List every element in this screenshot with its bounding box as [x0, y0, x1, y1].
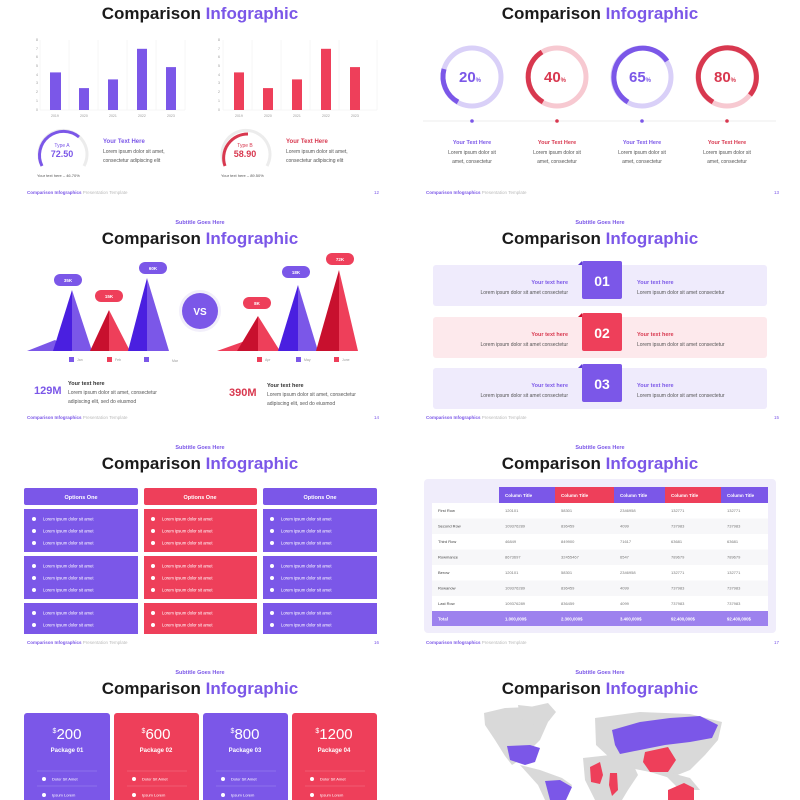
table: 132771 [727, 508, 741, 513]
table: Total [438, 616, 448, 622]
map [484, 703, 722, 800]
table: Column Title [505, 493, 533, 498]
row 03: Lorem ipsum dolor sit amet consectetur [480, 393, 568, 399]
table: 132771 [671, 570, 685, 575]
slide 6: data table [424, 445, 780, 645]
table: First Row [438, 508, 455, 513]
donut 65%: 65% [629, 69, 652, 86]
table: 109376289 [505, 524, 526, 528]
option columns: Lorem ipsum dolor sit amet [162, 516, 213, 522]
footer slide 1: 12 [374, 190, 380, 195]
subtitle slide 4: Subtitle Goes Here [575, 220, 625, 226]
bubbles right: 72K [336, 257, 345, 262]
legend right: Apr [265, 358, 271, 362]
table: 92.400,000$ [671, 616, 696, 622]
bar chart red: 3 [218, 81, 220, 85]
legend left: Feb [115, 358, 121, 362]
gauge type B: Your text here – 89.50% [221, 173, 264, 178]
package cards: 200 [56, 726, 81, 743]
package cards: Ipsum Lorem [142, 792, 166, 798]
row 02: Your text here [531, 332, 568, 338]
option columns: Lorem ipsum dolor sit amet [281, 564, 332, 568]
bar chart red: 5 [218, 64, 220, 68]
table: 58301 [561, 508, 573, 513]
slide 4: numbered rows [426, 220, 780, 420]
option columns: Lorem ipsum dolor sit amet [281, 622, 332, 628]
legend right: June [342, 358, 350, 362]
table: Column Title [561, 493, 589, 498]
package cards [24, 713, 377, 800]
table [424, 479, 776, 633]
stat 129M: 129M [34, 385, 62, 397]
table: 63681 [671, 539, 683, 544]
text block A: Your Text Here [103, 139, 145, 145]
text block B: Your Text Here [286, 139, 328, 145]
row 02: Lorem ipsum dolor sit amet consectetur [637, 342, 725, 348]
captions: Your Text Here [538, 140, 576, 146]
bubbles left: 35K [64, 278, 73, 283]
table: 6547 [620, 554, 630, 560]
table: 63681 [727, 539, 739, 544]
captions [448, 140, 752, 165]
donut 20% [443, 48, 501, 106]
bar chart purple: 1 [36, 99, 38, 103]
option columns: Lorem ipsum dolor sit amet [281, 588, 332, 592]
package cards: Dolor Sit Amet [231, 776, 257, 782]
legend left [69, 357, 179, 363]
table: 836459 [561, 586, 575, 590]
title slide 7: Comparison Infographic [102, 679, 298, 698]
bubbles left: 60K [149, 266, 158, 271]
table: 1.000,000$ [505, 616, 527, 622]
table: 120101 [505, 570, 519, 575]
text block B: Lorem ipsum dolor sit amet, [286, 149, 348, 155]
text block B: consectetur adipiscing elit [286, 158, 344, 164]
donut 65% [613, 48, 671, 106]
footer slide 6: Comparison Infographics Presentation Template [426, 640, 526, 645]
stat 390M: 390M [229, 387, 257, 399]
slide 7: pricing packages [24, 670, 377, 800]
table: 836459 [561, 601, 575, 606]
package cards: 600 [145, 726, 170, 743]
mountains right [217, 270, 358, 351]
bar chart purple: 2 [36, 90, 38, 94]
donut 40%: 40% [544, 69, 567, 86]
subtitle slide 5: Subtitle Goes Here [175, 445, 225, 451]
table: 32455467 [561, 554, 580, 560]
package cards: Package 04 [318, 748, 351, 754]
table: 849900 [561, 539, 575, 544]
row 02: Lorem ipsum dolor sit amet consectetur [480, 342, 568, 348]
option columns: Lorem ipsum dolor sit amet [43, 610, 94, 616]
footer slide 3: 14 [374, 415, 380, 420]
stat 129M: adipiscing elit, sed do eiusmod [68, 399, 136, 405]
row 01: Your text here [531, 280, 568, 286]
option columns: Lorem ipsum dolor sit amet [162, 540, 213, 546]
vs badge: VS [193, 307, 207, 318]
captions: amet, consectetur [452, 159, 492, 165]
option columns: Lorem ipsum dolor sit amet [43, 516, 94, 522]
timeline [423, 119, 776, 123]
table: 109376289 [505, 601, 526, 606]
bar chart red: 1 [218, 99, 220, 103]
footer slide 6: 17 [774, 640, 780, 645]
option columns: Lorem ipsum dolor sit amet [162, 564, 213, 568]
table: Berow [438, 570, 449, 575]
option columns: Options One [184, 495, 216, 501]
table: 737983 [671, 601, 685, 606]
captions: Lorem ipsum dolor sit [703, 150, 752, 156]
table: 120101 [505, 508, 519, 513]
title slide 5: Comparison Infographic [102, 454, 298, 473]
package cards: Ipsum Lorem [320, 792, 344, 798]
table: 2.300,000$ [561, 616, 583, 622]
slide 8: world map [484, 670, 722, 800]
table: Last Row [438, 601, 455, 606]
donut 80%: 80% [714, 69, 737, 86]
legend left: Jan [77, 358, 83, 362]
captions: Lorem ipsum dolor sit [448, 150, 497, 156]
gauge type A: Type A [54, 143, 70, 149]
bar chart red: 2023 [351, 114, 359, 118]
table: 58301 [561, 570, 573, 575]
table: 92.400,000$ [727, 616, 752, 622]
gauge type A: Your text here – 46.70% [37, 173, 80, 178]
package cards: Dolor Sit Amet [320, 776, 346, 782]
option columns: Options One [64, 495, 98, 501]
bar chart red: 2022 [322, 114, 330, 118]
vs badge [179, 290, 221, 332]
table: Second Row [438, 524, 461, 528]
package cards: Package 03 [229, 748, 262, 754]
table: 132771 [671, 508, 685, 513]
footer slide 5: Comparison Infographics Presentation Template [27, 640, 127, 645]
row 03 [433, 364, 767, 409]
footer slide 2: Comparison Infographics Presentation Template [426, 190, 526, 195]
bar chart red: 2 [218, 90, 220, 94]
slide 5: options grid [24, 445, 380, 645]
bubbles left: 15K [105, 294, 114, 299]
subtitle slide 7: Subtitle Goes Here [175, 670, 225, 676]
bar chart red: 7 [218, 47, 220, 51]
footer slide 1: Comparison Infographics Presentation Template [27, 190, 127, 195]
gauge type B: 58.90 [234, 149, 256, 159]
table: 4099 [620, 524, 630, 528]
table: 836459 [561, 524, 575, 528]
package cards: $ [315, 728, 319, 735]
table: 737983 [671, 524, 685, 528]
bar chart red: 2020 [264, 114, 272, 118]
slide 1: bar charts and gauges [27, 4, 380, 195]
subtitle slide 8: Subtitle Goes Here [575, 670, 625, 676]
table: 132771 [727, 570, 741, 575]
captions: Your Text Here [453, 140, 491, 146]
bubbles right [243, 253, 354, 309]
captions: Lorem ipsum dolor sit [533, 150, 582, 156]
row 01: Lorem ipsum dolor sit amet consectetur [637, 290, 725, 296]
bubbles right: 18K [292, 270, 301, 275]
package cards: Ipsum Lorem [231, 792, 255, 798]
bar chart purple: 2021 [109, 114, 117, 118]
bar chart purple: 2020 [80, 114, 88, 118]
option columns: Lorem ipsum dolor sit amet [162, 588, 213, 592]
table: 4099 [620, 601, 630, 606]
bar chart purple: 4 [36, 73, 38, 77]
option columns [24, 488, 377, 634]
title slide 8: Comparison Infographic [502, 679, 698, 698]
title slide 3: Comparison Infographic [102, 229, 298, 248]
title slide 4: Comparison Infographic [502, 229, 698, 248]
slide 2: donut percentages [423, 4, 780, 195]
stat 390M: Lorem ipsum dolor sit amet, consectetur [267, 392, 356, 398]
legend right: May [304, 358, 311, 362]
text block A: consectetur adipiscing elit [103, 158, 161, 164]
option columns: Lorem ipsum dolor sit amet [281, 516, 332, 522]
package cards: $ [142, 728, 146, 735]
table: 8673697 [505, 554, 521, 560]
captions: Lorem ipsum dolor sit [618, 150, 667, 156]
option columns: Options One [304, 495, 336, 501]
captions: amet, consectetur [537, 159, 577, 165]
table: Rowanow [438, 586, 456, 590]
text block A [103, 139, 165, 164]
package cards: Dolor Sit Amet [142, 776, 168, 782]
table: Column Title [620, 493, 648, 498]
bar chart red: 6 [218, 55, 220, 59]
subtitle slide 3: Subtitle Goes Here [175, 220, 225, 226]
table: 737983 [727, 524, 741, 528]
table: 737983 [671, 586, 685, 590]
gauge type A: 72.50 [51, 149, 73, 159]
footer slide 5: 16 [374, 640, 380, 645]
stat 129M: Lorem ipsum dolor sit amet, consectetur [68, 390, 157, 396]
captions: Your Text Here [708, 140, 746, 146]
captions: Your Text Here [623, 140, 661, 146]
stat 129M [34, 381, 157, 405]
option columns: Lorem ipsum dolor sit amet [162, 576, 213, 580]
bar chart purple: 6 [36, 55, 38, 59]
captions: amet, consectetur [622, 159, 662, 165]
table: 789679 [727, 554, 741, 560]
bubbles left [54, 262, 167, 302]
option columns: Lorem ipsum dolor sit amet [162, 610, 213, 616]
stat 129M: Your text here [68, 381, 105, 387]
row 01 [433, 261, 767, 306]
option columns: Lorem ipsum dolor sit amet [281, 528, 332, 534]
table: 71617 [620, 539, 632, 544]
option columns: Lorem ipsum dolor sit amet [281, 610, 332, 616]
captions: amet, consectetur [707, 159, 747, 165]
table: 2346958 [620, 570, 636, 575]
stat 390M [229, 383, 356, 407]
row 02 [433, 313, 767, 358]
footer slide 2: 13 [774, 190, 780, 195]
table: Rowmance [438, 554, 459, 560]
donut 20%: 20% [459, 69, 482, 86]
table: 737983 [727, 601, 741, 606]
bar chart purple: 3 [36, 81, 38, 85]
footer slide 3: Comparison Infographics Presentation Template [27, 415, 127, 420]
option columns: Lorem ipsum dolor sit amet [162, 622, 213, 628]
row 03: Lorem ipsum dolor sit amet consectetur [637, 393, 725, 399]
donut 40% [528, 48, 586, 106]
option columns: Lorem ipsum dolor sit amet [43, 564, 94, 568]
legend left: Mar [172, 359, 179, 363]
mountains left [27, 278, 169, 351]
gauge type B [221, 130, 270, 178]
option columns: Lorem ipsum dolor sit amet [281, 576, 332, 580]
option columns: Lorem ipsum dolor sit amet [43, 588, 94, 592]
bar chart purple: 8 [36, 38, 38, 42]
bar chart purple: 7 [36, 47, 38, 51]
package cards: 800 [234, 726, 259, 743]
footer slide 4: 15 [774, 415, 780, 420]
gauge type A [37, 130, 87, 178]
row 02: 02 [594, 325, 610, 341]
bar chart red: 2021 [293, 114, 301, 118]
bar chart purple [36, 38, 185, 118]
bar chart red: 0 [218, 108, 220, 112]
legend right [257, 357, 350, 362]
package cards: $ [53, 728, 57, 735]
package cards: Ipsum Lorem [52, 792, 76, 798]
row 03: Your text here [637, 383, 674, 389]
table: Column Title [671, 493, 699, 498]
row 01: Lorem ipsum dolor sit amet consectetur [480, 290, 568, 296]
title slide 2: Comparison Infographic [502, 4, 698, 23]
row 03: Your text here [531, 383, 568, 389]
bar chart purple: 2019 [51, 114, 59, 118]
title slide 6: Comparison Infographic [502, 454, 698, 473]
table: 3.400,000$ [620, 616, 642, 622]
text block B [286, 139, 348, 164]
row 02: Your text here [637, 332, 674, 338]
bar chart purple: 2022 [138, 114, 146, 118]
option columns: Lorem ipsum dolor sit amet [281, 540, 332, 546]
package cards: Dolor Sit Amet [52, 776, 78, 782]
package cards: 1200 [319, 726, 353, 743]
text block A: Lorem ipsum dolor sit amet, [103, 149, 165, 155]
row 01: 01 [594, 273, 610, 289]
table: 46849 [505, 539, 517, 544]
option columns: Lorem ipsum dolor sit amet [43, 576, 94, 580]
option columns: Lorem ipsum dolor sit amet [43, 622, 94, 628]
package cards: Package 02 [140, 748, 173, 754]
title slide 1: Comparison Infographic [102, 4, 298, 23]
bar chart purple: 2023 [167, 114, 175, 118]
stat 390M: adipiscing elit, sed do eiusmod [267, 401, 335, 407]
table: Third Row [438, 539, 456, 544]
option columns: Lorem ipsum dolor sit amet [162, 528, 213, 534]
bar chart red: 8 [218, 38, 220, 42]
bubbles right: 8K [254, 301, 261, 306]
table: 737983 [727, 586, 741, 590]
bar chart red: 4 [218, 73, 220, 77]
package cards: Package 01 [51, 748, 84, 754]
table: 789679 [671, 554, 685, 560]
table: 4099 [620, 586, 630, 590]
gauge type B: Type B [237, 143, 253, 149]
bar chart purple: 0 [36, 108, 38, 112]
row 03: 03 [594, 376, 610, 392]
stat 390M: Your text here [267, 383, 304, 389]
package cards: $ [231, 728, 235, 735]
footer slide 4: Comparison Infographics Presentation Template [426, 415, 526, 420]
table: Column Title [727, 493, 755, 498]
slide 3: mountain chart vs [27, 220, 380, 420]
bar chart red: 2019 [235, 114, 243, 118]
bar chart purple: 5 [36, 64, 38, 68]
table: 109376289 [505, 586, 526, 590]
subtitle slide 6: Subtitle Goes Here [575, 445, 625, 451]
option columns: Lorem ipsum dolor sit amet [43, 540, 94, 546]
option columns: Lorem ipsum dolor sit amet [43, 528, 94, 534]
donut 80% [698, 48, 756, 106]
row 01: Your text here [637, 280, 674, 286]
table: 2346958 [620, 508, 636, 513]
bar chart red [218, 38, 377, 118]
